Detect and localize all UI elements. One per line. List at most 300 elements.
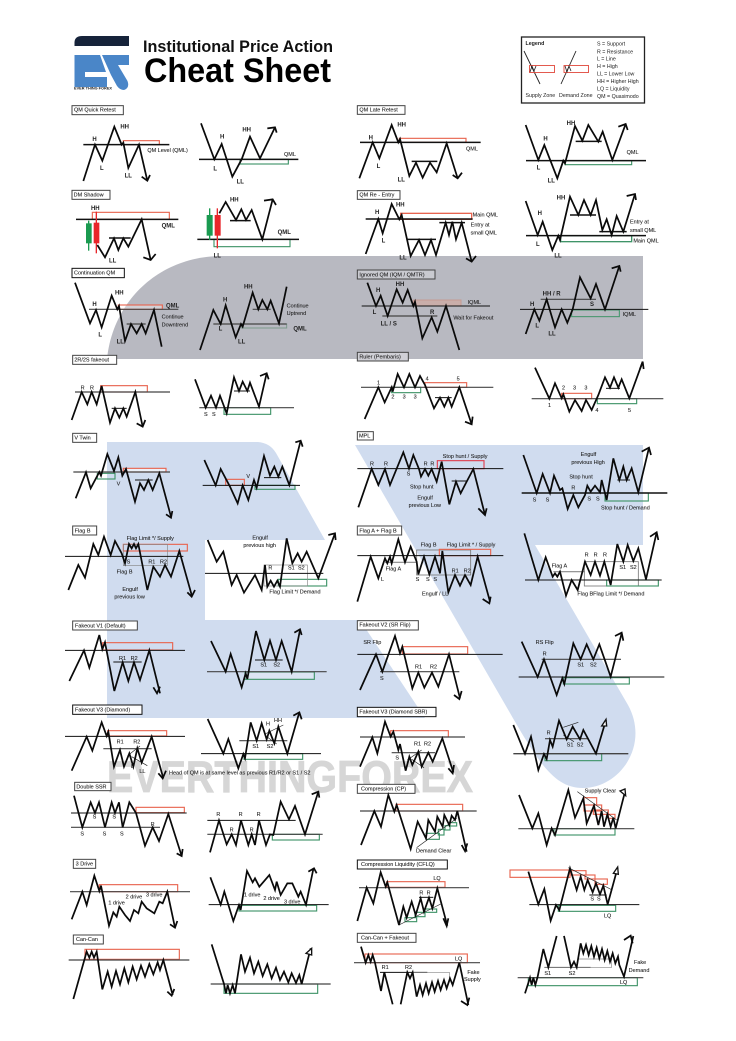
chart: bearish quick retest: LL (125, 173, 132, 179)
label: Compression (CP) (357, 784, 415, 793)
chart: bearish MPL: R (424, 462, 428, 468)
chart: bearish 3 drive (70, 876, 190, 928)
chart: bearish quick retest: L (100, 166, 104, 172)
chart: bullish late retest: L (537, 166, 541, 172)
chart: bullish 3 drive: 1 drive (244, 893, 260, 899)
legend: HH = Higher High (597, 79, 639, 85)
chart: bullish RS flip: R (543, 651, 547, 657)
chart: bearish ignored QM: LL / S (381, 322, 397, 328)
chart: bullish late retest (526, 121, 646, 184)
chart: bearish ruler: 1 (377, 381, 380, 387)
chart: bullish quick retest: H (220, 134, 224, 140)
chart: bearish re-entry: LL (399, 255, 407, 261)
panel: QM Quick Retest (72, 106, 298, 186)
chart: bearish double SSR: S (103, 831, 107, 837)
chart: bullish late retest: LL (548, 178, 555, 184)
chart: bullish quick retest: LL (237, 180, 244, 186)
chart: continue uptrend: H (223, 298, 227, 304)
chart: bullish V twin: V (246, 474, 250, 480)
chart: bullish flag B: Flag Limit */ Demand (269, 589, 321, 595)
chart: bearish MPL: R (370, 462, 374, 468)
legend: Supply Zone (526, 93, 555, 99)
chart: bullish flag A + B: S2 (630, 565, 637, 571)
chart: bearish re-entry: H (375, 210, 379, 216)
chart: bullish quick retest: L (213, 166, 217, 172)
chart: bullish ignored QM: IQML (623, 312, 636, 318)
chart: bullish flag A + B: R (585, 552, 589, 558)
chart: bullish ruler: 2 (562, 386, 565, 392)
chart: bullish ruler: 3 (573, 386, 576, 392)
label: MPL: MPL (359, 434, 370, 440)
label: Can-Can + Fakeout: Can-Can + Fakeout (361, 935, 409, 941)
chart: bearish late retest: L (377, 164, 381, 170)
chart: bullish diamond SBR (513, 719, 628, 770)
chart: continue downtrend: Downtrend (162, 322, 188, 328)
chart: bullish ruler: 3 (584, 386, 587, 392)
chart: bearish late retest: HH (397, 122, 406, 128)
chart: bullish can-can fakeout (518, 936, 649, 993)
chart: bullish MPL: S (596, 496, 600, 502)
chart: bullish compression (518, 789, 634, 845)
chart: bullish ignored QM: HH / R (543, 291, 561, 297)
logo (74, 36, 129, 90)
chart: bearish quick retest (83, 125, 188, 181)
chart: bullish V twin (203, 441, 303, 503)
title: Cheat Sheet (144, 52, 331, 90)
chart: bullish can-can (211, 944, 331, 993)
chart: bullish diamond SBR: R (547, 731, 551, 737)
legend: Demand Zone (559, 93, 593, 99)
chart: bearish flag B: Flag Limit */ Supply (127, 536, 174, 542)
chart: bearish ruler: 5 (457, 376, 460, 382)
chart: continue uptrend: QML (293, 327, 307, 333)
label: V Twin (73, 433, 97, 442)
label: Flag B: Flag B (75, 528, 91, 534)
chart: bullish compression liquidity: LQ (604, 914, 611, 920)
chart: bearish MPL (357, 452, 503, 515)
chart: bearish fakeout: R (90, 385, 94, 391)
chart: bullish re-entry: H (538, 211, 542, 217)
chart: bullish can-can fakeout: LQ (620, 980, 627, 986)
chart: bullish shadow: LL (214, 253, 221, 259)
chart: bearish ignored QM: R (430, 310, 435, 316)
chart: bullish re-entry: HH (557, 195, 565, 201)
chart: bullish re-entry: Main QML (633, 239, 659, 245)
label: Can-Can (73, 935, 103, 944)
chart: bullish flag A + B: R (603, 552, 607, 558)
chart: bearish late retest: LL (398, 178, 405, 184)
chart: continue downtrend: HH (115, 290, 124, 296)
legend: H = High (597, 64, 618, 70)
chart: bullish flag B: R (268, 566, 272, 572)
chart: bullish RS flip: S1 (577, 663, 584, 669)
chart: continue downtrend (75, 283, 188, 347)
label: QM Re - Entry (357, 191, 400, 199)
label: Double SSR (75, 782, 111, 791)
chart: bearish diamond: L (131, 764, 134, 770)
chart: bearish compression liquidity: R (427, 890, 431, 896)
title: Institutional Price Action (143, 37, 333, 56)
chart: bullish 3 drive: 2 drive (263, 896, 280, 902)
chart: bearish MPL: R (384, 462, 388, 468)
chart: bullish fakeout (195, 373, 294, 418)
chart: bearish flag A + B: Flag B (421, 542, 437, 548)
chart: bearish re-entry: Entry at (471, 223, 490, 229)
chart: continue uptrend: L (219, 327, 223, 333)
chart: bearish late retest: QML (466, 147, 478, 153)
label: QM Re - Entry: QM Re - Entry (359, 193, 395, 199)
chart: bearish fakeout V1 (65, 635, 185, 693)
chart: bearish diamond SBR: R2 (424, 741, 431, 747)
chart: bearish 3 drive: 3 drive (146, 893, 162, 899)
label: DM Shadow (72, 190, 110, 199)
chart: continue uptrend (200, 284, 309, 350)
chart: bearish flag B: previous low (114, 594, 145, 600)
chart: bearish diamond SBR: S (395, 755, 399, 761)
chart: bearish ruler: 3 (414, 394, 417, 400)
chart: bullish compression liquidity (510, 867, 639, 921)
chart: bearish re-entry: Main QML (473, 213, 498, 219)
label: Flag A + Flag B (357, 526, 402, 535)
chart: bearish V twin: V (117, 482, 121, 488)
chart: bearish ignored QM: IQML (468, 300, 481, 306)
label: Can-Can + Fakeout (357, 933, 416, 942)
chart: bearish quick retest: H (92, 137, 97, 143)
chart: bullish diamond SBR: S1 (567, 743, 573, 749)
chart: bullish flag B: previous high (243, 543, 276, 549)
legend: L = Line (597, 56, 616, 62)
label: Fakeout V3 (Diamond) (73, 705, 142, 714)
chart: bearish V twin (73, 454, 172, 518)
chart: bullish ignored QM: L (535, 323, 539, 329)
chart: bearish diamond: LL (139, 769, 145, 775)
chart: bearish SR flip: R2 (430, 665, 437, 671)
chart: bullish MPL: Stop hunt (569, 474, 593, 480)
chart: bearish 3 drive: 2 drive (126, 894, 142, 900)
chart: bearish flag A + B: Flag Limit * / Supply (447, 542, 496, 548)
chart: bullish can-can fakeout: S2 (569, 971, 575, 977)
legend: Legend (526, 41, 544, 47)
chart: bearish SR flip: S (380, 676, 384, 682)
label: 3 Drive (73, 859, 96, 868)
chart: bearish double SSR: S (93, 815, 97, 821)
chart: bullish can-can fakeout: Fake (634, 960, 646, 966)
chart: bearish flag B: R2 (160, 559, 167, 565)
label: QM Quick Retest (72, 106, 123, 115)
chart: bearish flag B (65, 536, 195, 600)
chart: bearish quick retest: QM Level (QML) (147, 148, 188, 154)
chart: bearish ruler: 4 (426, 376, 429, 382)
legend: LQ = Liquidity (597, 87, 630, 93)
label: DM Shadow: DM Shadow (74, 193, 104, 199)
chart: bullish re-entry (526, 194, 659, 259)
chart: bearish can-can (69, 949, 189, 999)
chart: bullish re-entry: small QML (630, 228, 656, 234)
chart: bullish diamond: S1 (252, 744, 259, 750)
panel: Fakeout V2 and Fakeout V3 Diamond SBR (357, 621, 664, 773)
chart: bullish shadow: HH (230, 198, 239, 204)
chart: bearish diamond SBR: R1 (414, 741, 421, 747)
chart: bearish SR flip: R1 (415, 665, 422, 671)
chart: bearish flag B: Flag B (117, 570, 133, 576)
chart: bullish flag A + B: Flag BFlag Limit */ Demand (577, 592, 644, 598)
chart: bearish can-can fakeout: Fake (467, 970, 480, 976)
label: MPL (357, 432, 373, 440)
chart: bearish SR flip (357, 636, 503, 699)
chart: bearish MPL: Stop hunt (410, 484, 434, 490)
chart: bearish MPL: R (430, 462, 434, 468)
chart: bearish compression liquidity: R (419, 890, 423, 896)
panel: Double SSR, 3 Drive, Can-Can (69, 782, 331, 999)
chart: bullish ruler: 1 (548, 403, 551, 409)
panel: 2R/2S fakeout, V Twin, Flag B (65, 355, 336, 600)
chart: bearish compression: Demand Clear (416, 848, 452, 854)
chart: bullish double SSR: R (250, 827, 254, 833)
label: Ruler (Pembaris) (357, 352, 408, 361)
chart: bearish ignored QM (362, 282, 494, 350)
legend: LL = Lower Low (597, 71, 635, 77)
chart: bearish late retest: H (369, 135, 373, 141)
chart: bearish late retest (359, 122, 481, 184)
chart: bearish fakeout V1: R1 (119, 656, 126, 662)
label: QM Late Retest (357, 106, 405, 114)
label: Double SSR: Double SSR (76, 784, 107, 790)
chart: bearish fakeout V1: R2 (131, 656, 138, 662)
chart: bullish late retest: QML (627, 150, 639, 156)
label: Fakeout V1 (Default) (73, 621, 137, 630)
chart: bearish can-can fakeout: Supply (464, 977, 481, 983)
chart: bullish RS flip: S2 (590, 663, 597, 669)
chart: bearish flag A + B (357, 539, 503, 603)
label: 3 Drive: 3 Drive (76, 861, 93, 867)
label: Compression Liquidity (CFLQ) (357, 860, 447, 869)
chart: continue downtrend: QML (166, 303, 180, 309)
chart: bearish flag B: S (127, 560, 131, 566)
chart: bearish ignored QM: H (376, 288, 380, 294)
chart: bullish fakeout: S (204, 412, 208, 418)
chart: bullish ruler (532, 362, 663, 414)
chart: bullish MPL: Stop hunt / Demand (601, 505, 650, 511)
chart: bullish diamond: S2 (267, 744, 273, 750)
chart: bearish double SSR: S (120, 831, 124, 837)
panel: Fakeout V1 and Fakeout V3 Diamond (65, 621, 327, 778)
label: Fakeout V1 (Default): Fakeout V1 (Default) (75, 623, 126, 629)
background watermark: blue logo right (355, 445, 643, 788)
chart: bullish RS flip: RS Flip (536, 640, 554, 646)
chart: bearish ruler: 2 (391, 394, 394, 400)
chart: bearish flag A + B: R2 (464, 568, 471, 574)
label: Ignored QM (357, 270, 435, 279)
label: Compression Liquidity (CFLQ): Compression Liquidity (CFLQ) (361, 862, 435, 868)
chart: bullish diamond SBR: S2 (577, 743, 583, 749)
chart: bullish late retest: H (543, 136, 548, 142)
chart: bullish MPL: S (587, 496, 591, 502)
label: Fakeout V3 (Diamond): Fakeout V3 (Diamond) (75, 707, 130, 713)
label: Compression (CP): Compression (CP) (361, 787, 406, 793)
label: Fakeout V2 (SR Flip): Fakeout V2 (SR Flip) (359, 623, 411, 629)
panel: QM Late Retest (357, 106, 646, 184)
chart: bearish ruler: 3 (403, 394, 406, 400)
chart: bearish double SSR: R (151, 822, 155, 828)
chart: continue uptrend: LL (238, 339, 246, 345)
chart: bullish RS flip (519, 633, 664, 695)
background watermark: grey shape (107, 256, 643, 359)
chart: bearish SR flip: SR Flip (363, 640, 381, 646)
chart: bullish 3 drive (209, 868, 329, 921)
chart: bearish diamond: R1 (117, 739, 124, 745)
chart: bullish flag A + B (524, 532, 662, 598)
label: Flag B (73, 526, 97, 535)
chart: bullish fakeout: S (212, 412, 216, 418)
chart: bullish can-can fakeout: Demand (629, 968, 649, 974)
chart: bearish re-entry (366, 203, 498, 262)
chart: bearish double SSR: S (80, 831, 84, 837)
chart: bearish shadow: LL (109, 259, 117, 265)
chart: bullish shadow: QML (278, 230, 291, 236)
panel: Ruler, MPL, Flag A + Flag B (357, 352, 667, 603)
chart: continue downtrend: Continue (162, 314, 184, 320)
chart: bearish flag A + B: S (433, 577, 437, 583)
chart: bullish MPL: S (546, 498, 550, 504)
chart: bullish MPL: previous High (571, 460, 605, 466)
chart: bearish can-can fakeout: R1 (382, 965, 389, 971)
chart: bearish compression liquidity (357, 872, 469, 926)
chart: bearish shadow (76, 206, 178, 265)
label: 2R/2S fakeout (73, 355, 117, 364)
label: Continuation QM: Continuation QM (74, 271, 116, 277)
chart: bullish double SSR: R (257, 812, 261, 818)
chart: bullish MPL: Engulf (581, 452, 597, 458)
chart: bearish re-entry: HH (396, 203, 405, 209)
title (143, 37, 333, 90)
chart: bearish ignored QM: HH (396, 282, 404, 288)
panel: QM Re-Entry and Ignored QM (357, 191, 659, 350)
label: Fakeout V2 (SR Flip) (357, 621, 418, 630)
chart: bullish diamond (201, 712, 321, 768)
chart: bearish re-entry: small QML (471, 230, 497, 236)
chart: bearish flag A + B: L (381, 577, 384, 583)
chart: bullish flag A + B: Flag A (552, 564, 568, 570)
chart: bullish ignored QM (520, 266, 648, 337)
chart: bearish double SSR (71, 796, 187, 856)
chart: bearish flag A + B: Engulf / LL (422, 592, 448, 598)
chart: bullish MPL: S (533, 498, 537, 504)
chart: bullish quick retest (199, 123, 298, 186)
chart: bearish shadow: HH (91, 206, 100, 212)
chart: bearish MPL: previous Low (409, 503, 441, 509)
chart: continue downtrend: H (92, 302, 97, 308)
label: QM Quick Retest: QM Quick Retest (74, 108, 116, 114)
chart: bearish shadow: QML (162, 224, 175, 230)
chart: bullish flag B: Engulf (252, 535, 268, 541)
chart: bullish fakeout V1 (207, 629, 327, 687)
chart: bullish can-can fakeout: S1 (544, 971, 551, 977)
chart: continue uptrend: Uptrend (287, 311, 306, 317)
chart: bullish re-entry: Entry at (630, 219, 649, 225)
chart: bearish fakeout (72, 385, 170, 427)
chart: bearish MPL: Engulf (417, 495, 433, 501)
label: Fakeout V3 (Diamond SBR): Fakeout V3 (Diamond SBR) (359, 709, 427, 715)
chart: continue uptrend: Continue (287, 303, 309, 309)
chart: bearish flag B: Engulf (122, 587, 138, 593)
chart: bearish ignored QM: Wait for Fakeout (453, 315, 494, 321)
chart: bearish diamond: R2 (133, 739, 140, 745)
label: Fakeout V3 (Diamond SBR) (357, 707, 436, 717)
chart: bullish fakeout V1: S2 (273, 663, 280, 669)
chart: bullish flag B: S1 (288, 566, 295, 572)
chart: continue uptrend: HH (244, 284, 253, 290)
background watermark: blue logo left (107, 442, 425, 718)
chart: bullish quick retest: QML (284, 152, 296, 158)
background watermark: wordmark: EVERTHINGFOREX (107, 753, 473, 802)
label: Flag A + Flag B: Flag A + Flag B (359, 528, 397, 534)
chart: bullish flag A + B: S1 (619, 565, 626, 571)
chart: bearish ruler (361, 374, 493, 424)
chart: bullish double SSR (207, 792, 323, 852)
chart: bullish late retest: HH (567, 121, 575, 127)
chart: bullish 3 drive: 3 drive (284, 899, 300, 905)
chart: bullish flag B (205, 533, 336, 595)
chart: bearish can-can fakeout (354, 947, 481, 1005)
chart: bearish flag A + B: S (426, 577, 430, 583)
chart: bullish ignored QM: H (530, 302, 534, 308)
chart: bullish compression liquidity: S (597, 896, 601, 902)
panel: Compression, Compression Liquidity, Can-Can + Fakeout (354, 784, 649, 1005)
legend: S = Support (597, 42, 626, 48)
label: V Twin: V Twin (74, 436, 91, 442)
legend (522, 37, 644, 103)
chart: continue downtrend: LL (117, 339, 124, 345)
label: Continuation QM (72, 268, 124, 278)
chart: bearish flag B: R1 (148, 559, 155, 565)
legend: QM = Quasimodo (597, 94, 639, 100)
chart: bearish can-can fakeout: R2 (405, 965, 412, 971)
chart: bullish fakeout V1: S1 (260, 663, 267, 669)
chart: bullish compression liquidity: S (590, 896, 594, 902)
chart: bullish ruler: 5 (628, 408, 631, 414)
chart: bearish flag A + B: R1 (452, 568, 459, 574)
chart: bearish fakeout: R (81, 385, 85, 391)
label: Ignored QM: Ignored QM (IQM / QMTR) (359, 272, 425, 278)
label: Can-Can: Can-Can (76, 937, 98, 943)
chart: bearish MPL: S (407, 471, 411, 477)
chart: bearish diamond: Head of QM is at same level as previous R1/R2 or S1 / S2 (169, 771, 310, 777)
chart: bearish 3 drive: 1 drive (108, 901, 125, 907)
chart: bullish re-entry: LL (554, 253, 562, 259)
chart: bullish flag B: S2 (298, 566, 305, 572)
chart: bullish double SSR: R (230, 827, 234, 833)
chart: bearish quick retest: HH (120, 125, 129, 131)
chart: bullish ruler: 4 (595, 408, 598, 414)
label: QM Late Retest: QM Late Retest (359, 108, 398, 114)
chart: bullish double SSR: R (239, 812, 243, 818)
chart: bearish double SSR: S (112, 815, 116, 821)
chart: bullish diamond: HH (274, 718, 282, 724)
chart: bearish diamond (65, 722, 310, 778)
chart: bullish re-entry: L (536, 242, 540, 248)
chart: bullish ignored QM: S (590, 302, 594, 308)
chart: bearish compression (360, 795, 477, 854)
chart: bullish diamond: H (266, 721, 270, 727)
label: Ruler (Pembaris): Ruler (Pembaris) (359, 355, 401, 361)
chart: continue downtrend: L (98, 333, 102, 339)
chart: bullish ignored QM: LL (548, 331, 556, 337)
legend: R = Resistance (597, 49, 633, 55)
chart: bearish ignored QM: L (373, 310, 377, 316)
chart: bearish flag A + B: Flag A (386, 567, 402, 573)
chart: bearish compression liquidity: LQ (433, 876, 441, 882)
chart: bearish re-entry: L (382, 238, 386, 244)
